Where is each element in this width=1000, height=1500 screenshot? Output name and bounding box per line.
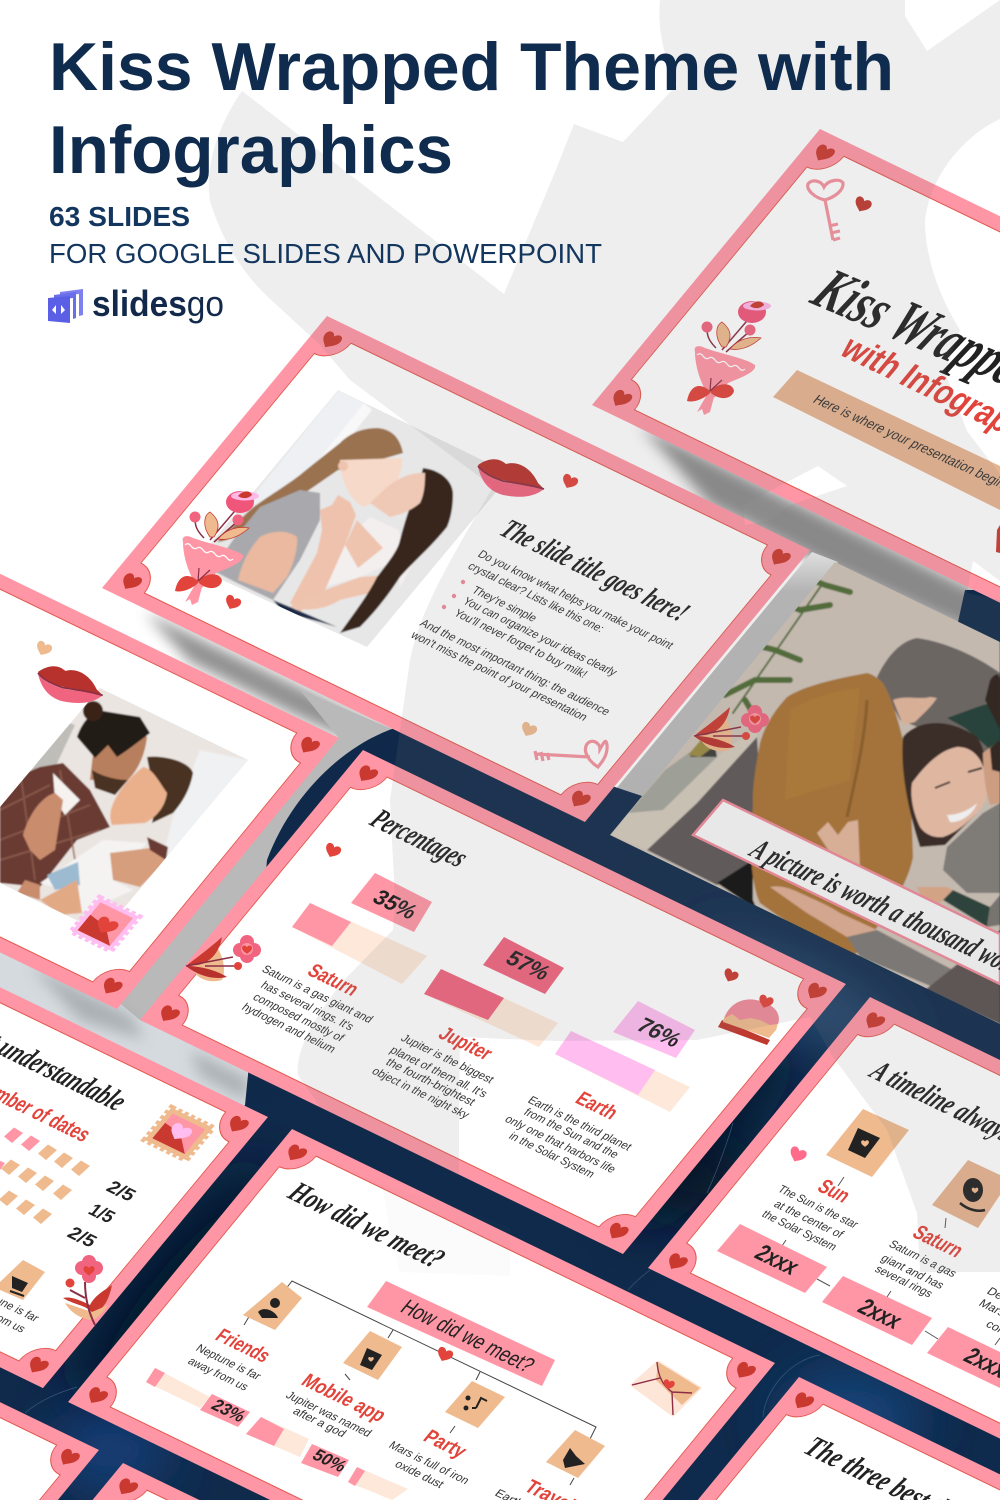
slide: timeline xyxy=(648,997,1000,1500)
slide: three best things xyxy=(575,1377,1000,1500)
item: Saturn 35%: hydrogen and helium xyxy=(239,1001,339,1055)
photo: couple hugging a pillow xyxy=(600,550,1000,1050)
timeline item: Sun: at the center of xyxy=(771,1198,847,1241)
rating values: 2/5 xyxy=(63,1224,101,1252)
timeline item: Saturn: giant and has xyxy=(878,1252,947,1292)
subtitle band xyxy=(773,370,1000,510)
item: Earth 76%: only one that harbors life xyxy=(502,1113,619,1176)
flower on photo xyxy=(694,705,769,751)
timeline item: Sun: Sun xyxy=(813,1175,856,1207)
slide: percentages xyxy=(140,750,846,1254)
shadow: between couple slide and percentages slide xyxy=(110,690,430,1030)
icon: envelope xyxy=(632,1362,700,1415)
slide: the slide title goes here xyxy=(102,316,810,822)
item: Friends: Neptune is far xyxy=(193,1342,264,1382)
body text: crystal clear? Lists like this one: xyxy=(465,560,607,635)
timeline item: Saturn: several rings xyxy=(872,1263,936,1300)
item: Mobile app: Jupiter was named xyxy=(283,1389,375,1439)
icon: heart xyxy=(34,640,53,658)
navy background xyxy=(0,590,1000,1500)
photo slide: couple on sofa xyxy=(600,550,1000,1050)
item: Friends: away from us xyxy=(185,1355,252,1393)
slide heading: How did we meet? xyxy=(281,1175,452,1274)
slide: understandable xyxy=(0,883,268,1388)
shadow: below couple slide xyxy=(0,940,260,1110)
platforms line: FOR GOOGLE SLIDES AND POWERPOINT xyxy=(49,238,602,269)
icon: lips xyxy=(38,666,103,703)
item: Party: oxide dust xyxy=(392,1458,447,1491)
item: Friends: 23% xyxy=(207,1396,250,1425)
item: Friends xyxy=(146,1282,302,1427)
item: Mobile app: 50% xyxy=(308,1446,351,1475)
slide: bottom partial xyxy=(0,1463,606,1500)
body text: They're simple xyxy=(469,584,540,625)
timeline item: Sun: The Sun is the star xyxy=(775,1183,861,1231)
body text: won't miss the point of your presentation xyxy=(407,628,591,723)
item: Jupiter 57%: the fourth-brightest xyxy=(383,1056,479,1108)
item: Saturn 35%: composed mostly of xyxy=(250,991,348,1044)
item: Earth 76%: 76% xyxy=(632,1013,687,1052)
item: Jupiter 57%: object in the night sky xyxy=(369,1065,473,1121)
photo: two men kissing xyxy=(0,688,248,922)
bullets xyxy=(442,580,465,609)
item: Party: Party xyxy=(419,1426,472,1462)
main title: Kiss Wrapped Theme with xyxy=(49,29,894,105)
band text: How did we meet? xyxy=(396,1295,540,1377)
icon: heart xyxy=(323,842,342,860)
shadow: beside slide with two women xyxy=(615,552,838,798)
body text: Do you know what helps you make your point xyxy=(475,548,677,652)
icon: flower xyxy=(63,1255,112,1325)
rating values: 2/5 xyxy=(102,1178,140,1206)
icon: key xyxy=(535,741,607,767)
shadow: dark patches below couple slide xyxy=(30,965,250,1100)
shadow: under title slide xyxy=(640,425,1000,645)
item: Mobile app xyxy=(246,1331,402,1477)
rating squares xyxy=(0,1128,90,1224)
timeline item: Saturn xyxy=(822,1160,1000,1345)
item: Saturn 35%: Saturn is a gas giant and xyxy=(259,963,376,1026)
item: Party xyxy=(348,1381,505,1500)
timeline item: Sun: 2xxx xyxy=(749,1240,805,1280)
body text: You'll never forget to buy milk! xyxy=(451,607,591,681)
slide: title xyxy=(592,129,1000,639)
faint lower silhouette overlay xyxy=(375,1182,510,1276)
icon: lips xyxy=(478,459,544,497)
icon: bouquet xyxy=(175,491,259,605)
icon: heart xyxy=(721,967,740,985)
slide count: 63 SLIDES xyxy=(49,201,190,232)
icon: bouquet xyxy=(687,301,771,415)
item: Earth 76% xyxy=(502,1001,695,1180)
icon: stamp xyxy=(145,1108,213,1160)
timeline item: third xyxy=(927,1285,1000,1388)
item: Party: Mars is full of iron xyxy=(386,1439,472,1487)
rating values: 1/5 xyxy=(84,1201,119,1227)
timeline item: Sun xyxy=(717,1109,909,1293)
icon: coffee box xyxy=(0,1260,45,1300)
tree connector xyxy=(244,1281,596,1485)
slide heading: The slide title goes here! xyxy=(494,514,696,627)
background silhouette overlay xyxy=(209,0,1000,1272)
band: how did we meet xyxy=(367,1281,555,1386)
icon: stamp xyxy=(71,898,139,951)
timeline item: Saturn: 2xxx xyxy=(852,1294,908,1334)
item: Saturn 35% xyxy=(186,873,432,1055)
caption band xyxy=(693,800,1000,985)
item: Jupiter 57%: Jupiter is the biggest xyxy=(398,1032,498,1086)
body text: You can organize your ideas clearly xyxy=(460,595,620,679)
item: Earth 76%: Earth is the third planet xyxy=(525,1094,635,1153)
photo: two women kissing xyxy=(211,390,500,647)
slide: how did we meet xyxy=(68,1129,775,1500)
body text: And the most important thing: the audience xyxy=(417,617,613,718)
slide heading: Percentages xyxy=(363,802,476,873)
item: Saturn 35%: has several rings. It's xyxy=(258,979,357,1033)
item: Earth 76%: in the Solar System xyxy=(506,1130,598,1180)
item: Saturn 35%: Saturn xyxy=(303,960,363,1000)
item: Earth 76%: Earth xyxy=(571,1088,622,1124)
item: Jupiter 57%: planet of them all. It's xyxy=(387,1044,491,1100)
icon: heart xyxy=(787,1145,808,1165)
shadow: under slide with two women xyxy=(145,612,600,832)
icon: partial flower at edge xyxy=(996,525,1000,553)
main title line 2: Infographics xyxy=(49,112,453,188)
icon: heart xyxy=(223,594,242,612)
slide: bottom left partial xyxy=(0,1216,99,1500)
slide: couple photo xyxy=(0,574,339,1009)
timeline item: Sun: the Solar System xyxy=(759,1208,840,1253)
header: title and subtitle xyxy=(48,29,894,324)
rating values xyxy=(63,1178,140,1252)
item: Jupiter 57%: 57% xyxy=(501,946,556,985)
icon: cake xyxy=(718,994,779,1045)
icon: heart xyxy=(852,195,873,215)
item: Earth 76%: from the Sun and the xyxy=(521,1106,622,1161)
item: Friends: Friends xyxy=(211,1325,275,1367)
item: Jupiter 57% xyxy=(369,937,564,1121)
item: Saturn 35%: 35% xyxy=(368,885,423,924)
item: Jupiter 57%: Jupiter xyxy=(434,1023,497,1064)
timeline item: Saturn: Saturn is a gas xyxy=(886,1238,960,1280)
timeline item: Saturn: Saturn xyxy=(908,1221,969,1262)
body text xyxy=(407,548,677,723)
icon: heart xyxy=(560,473,579,491)
connector lines xyxy=(782,1177,1000,1345)
item: Mobile app: after a god xyxy=(290,1405,349,1440)
icon: key xyxy=(808,180,843,240)
item: Mobile app: Mobile app xyxy=(297,1370,391,1426)
item: Travel xyxy=(492,1430,605,1500)
icon: heart xyxy=(435,1346,454,1364)
icon: heart xyxy=(519,721,538,739)
logo: slidesgo xyxy=(92,283,224,324)
